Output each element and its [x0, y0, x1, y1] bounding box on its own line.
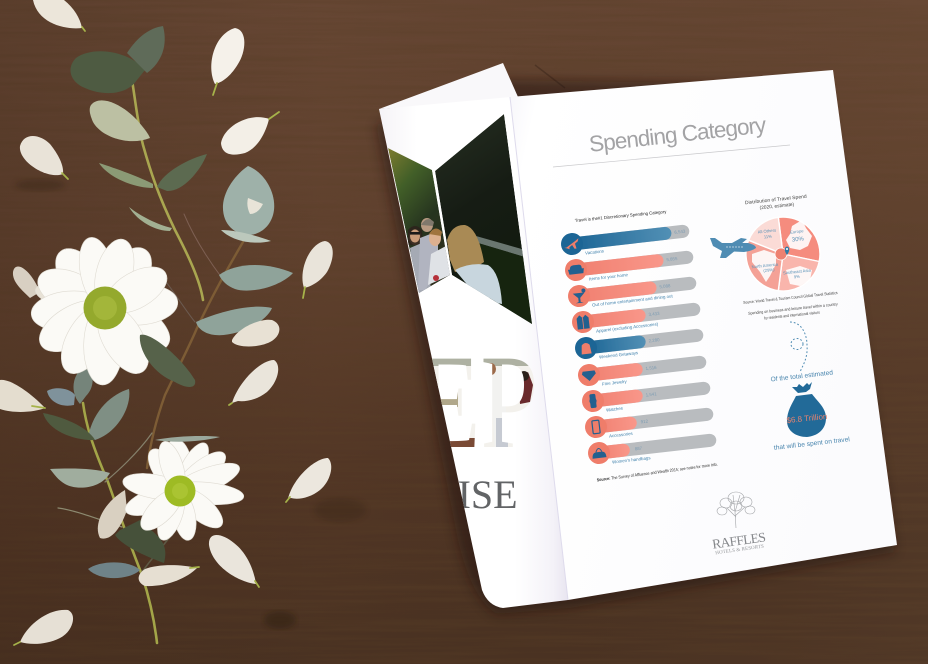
- pie chart: distribution of travel spend: Europe: [790, 228, 804, 235]
- photo window: right panel: [435, 114, 534, 326]
- bar: apparel: 3,433: [648, 311, 660, 317]
- daisy: large: [30, 234, 179, 386]
- bar: apparel: Apparel (excluding Accessories): [596, 321, 659, 334]
- bar: fine jewelry: [577, 351, 708, 389]
- pie title: Distribution of Travel Spend: [745, 194, 807, 206]
- stems and twigs: [58, 80, 243, 643]
- Raffles logo: [711, 492, 767, 556]
- pie note: Spending on business and leisure travel within a country: [748, 301, 838, 316]
- bar: women's handbags: Women's handbags: [612, 455, 652, 465]
- bar: fine jewelry: Fine Jewelry: [602, 379, 628, 387]
- logo subtitle: HOTELS & RESORTS: [715, 544, 765, 556]
- pie note: [748, 301, 838, 320]
- photo window: left panel: [388, 148, 450, 295]
- bag amount: $6.8 Trillion: [786, 412, 828, 425]
- page heading: Spending Category: [588, 112, 768, 157]
- bar: vacations: 6,543: [674, 229, 686, 235]
- logo tree: [717, 492, 755, 528]
- bar: out of home entertainment: [567, 272, 698, 310]
- icon: airplane: [710, 238, 756, 258]
- leaf over large daisy: [140, 335, 195, 387]
- globe and pin: [775, 246, 789, 260]
- bar: vacations: Vacations: [585, 248, 605, 256]
- big letters EP with photo inside: [432, 358, 534, 447]
- bar: watches: [581, 377, 712, 415]
- bar: apparel: [571, 298, 702, 336]
- pie chart: distribution of travel spend: 11%: [764, 234, 772, 239]
- icon: money bag: [786, 382, 828, 437]
- pie labels: All Others: [757, 228, 776, 234]
- right magazine page: [510, 70, 897, 600]
- pie note: by residents and international visitors: [764, 310, 820, 320]
- loose white petals: [0, 0, 333, 645]
- logo wordmark: RAFFLES: [711, 529, 767, 552]
- spent caption: that will be spent on travel: [774, 436, 851, 452]
- bar: items for your home: Items for your home: [589, 272, 629, 282]
- pie chart: distribution of travel spend: [745, 194, 820, 291]
- continent shapes: [752, 220, 812, 286]
- left rolled magazine page: [379, 63, 568, 608]
- page roll: [379, 97, 568, 608]
- bar: fine jewelry: 1,516: [645, 365, 657, 371]
- chart title: Travel is the#1 Discretionary Spending Category: [575, 209, 667, 223]
- bar: out of home entertainment: Out of home entertainment and dining out: [592, 293, 674, 308]
- bar: out of home entertainment: 5,088: [659, 283, 671, 289]
- pie sectors: [746, 217, 820, 291]
- eucalyptus leaves: [43, 26, 293, 578]
- total caption: Of the total estimated: [770, 369, 834, 384]
- bar: weekend getaways: [574, 324, 705, 362]
- magazine shadow: [376, 80, 895, 614]
- bar: accessories: [584, 403, 715, 441]
- bar: women's handbags: [587, 429, 718, 467]
- bar: items for your home: [564, 246, 695, 284]
- pie chart: distribution of travel spend: 9%: [794, 274, 800, 279]
- bar: vacations: [560, 220, 691, 258]
- chart source: Source: The Survey of Affluence and Wealth 2015; see notes for more info.: [596, 462, 718, 482]
- heading rule: [553, 145, 790, 167]
- bar: watches: Watches: [606, 406, 624, 413]
- bar: items for your home: 5,855: [666, 256, 678, 262]
- bar: women's handbags: 887: [634, 446, 643, 451]
- bar: watches: 1,541: [645, 391, 657, 397]
- dashed flight path: [790, 322, 807, 372]
- pie chart: distribution of travel spend: North America: [751, 262, 779, 269]
- headline fragment: MISE: [422, 472, 518, 517]
- bar: weekend getaways: 2,280: [648, 337, 660, 343]
- folded top flap: [379, 63, 518, 109]
- floral arrangement: [0, 0, 333, 645]
- bar: accessories: Accessories: [609, 431, 634, 439]
- pie chart: distribution of travel spend: Southeast Asia: [783, 267, 812, 275]
- pie chart: distribution of travel spend: 30%: [792, 236, 805, 244]
- pie source: Source: World Travel & Tourism Council Global Travel Statistics: [743, 290, 838, 305]
- bar chart: discretionary spending: [560, 209, 718, 482]
- bar: weekend getaways: Weekend Getaways: [599, 350, 639, 360]
- bar: accessories: 912: [640, 419, 649, 424]
- pie chart: distribution of travel spend: (29%): [763, 267, 775, 273]
- daisy: small: [121, 438, 245, 544]
- leaf over small daisy: [155, 436, 220, 442]
- pie chart: distribution of travel spend: (2020, estimate): [759, 202, 795, 211]
